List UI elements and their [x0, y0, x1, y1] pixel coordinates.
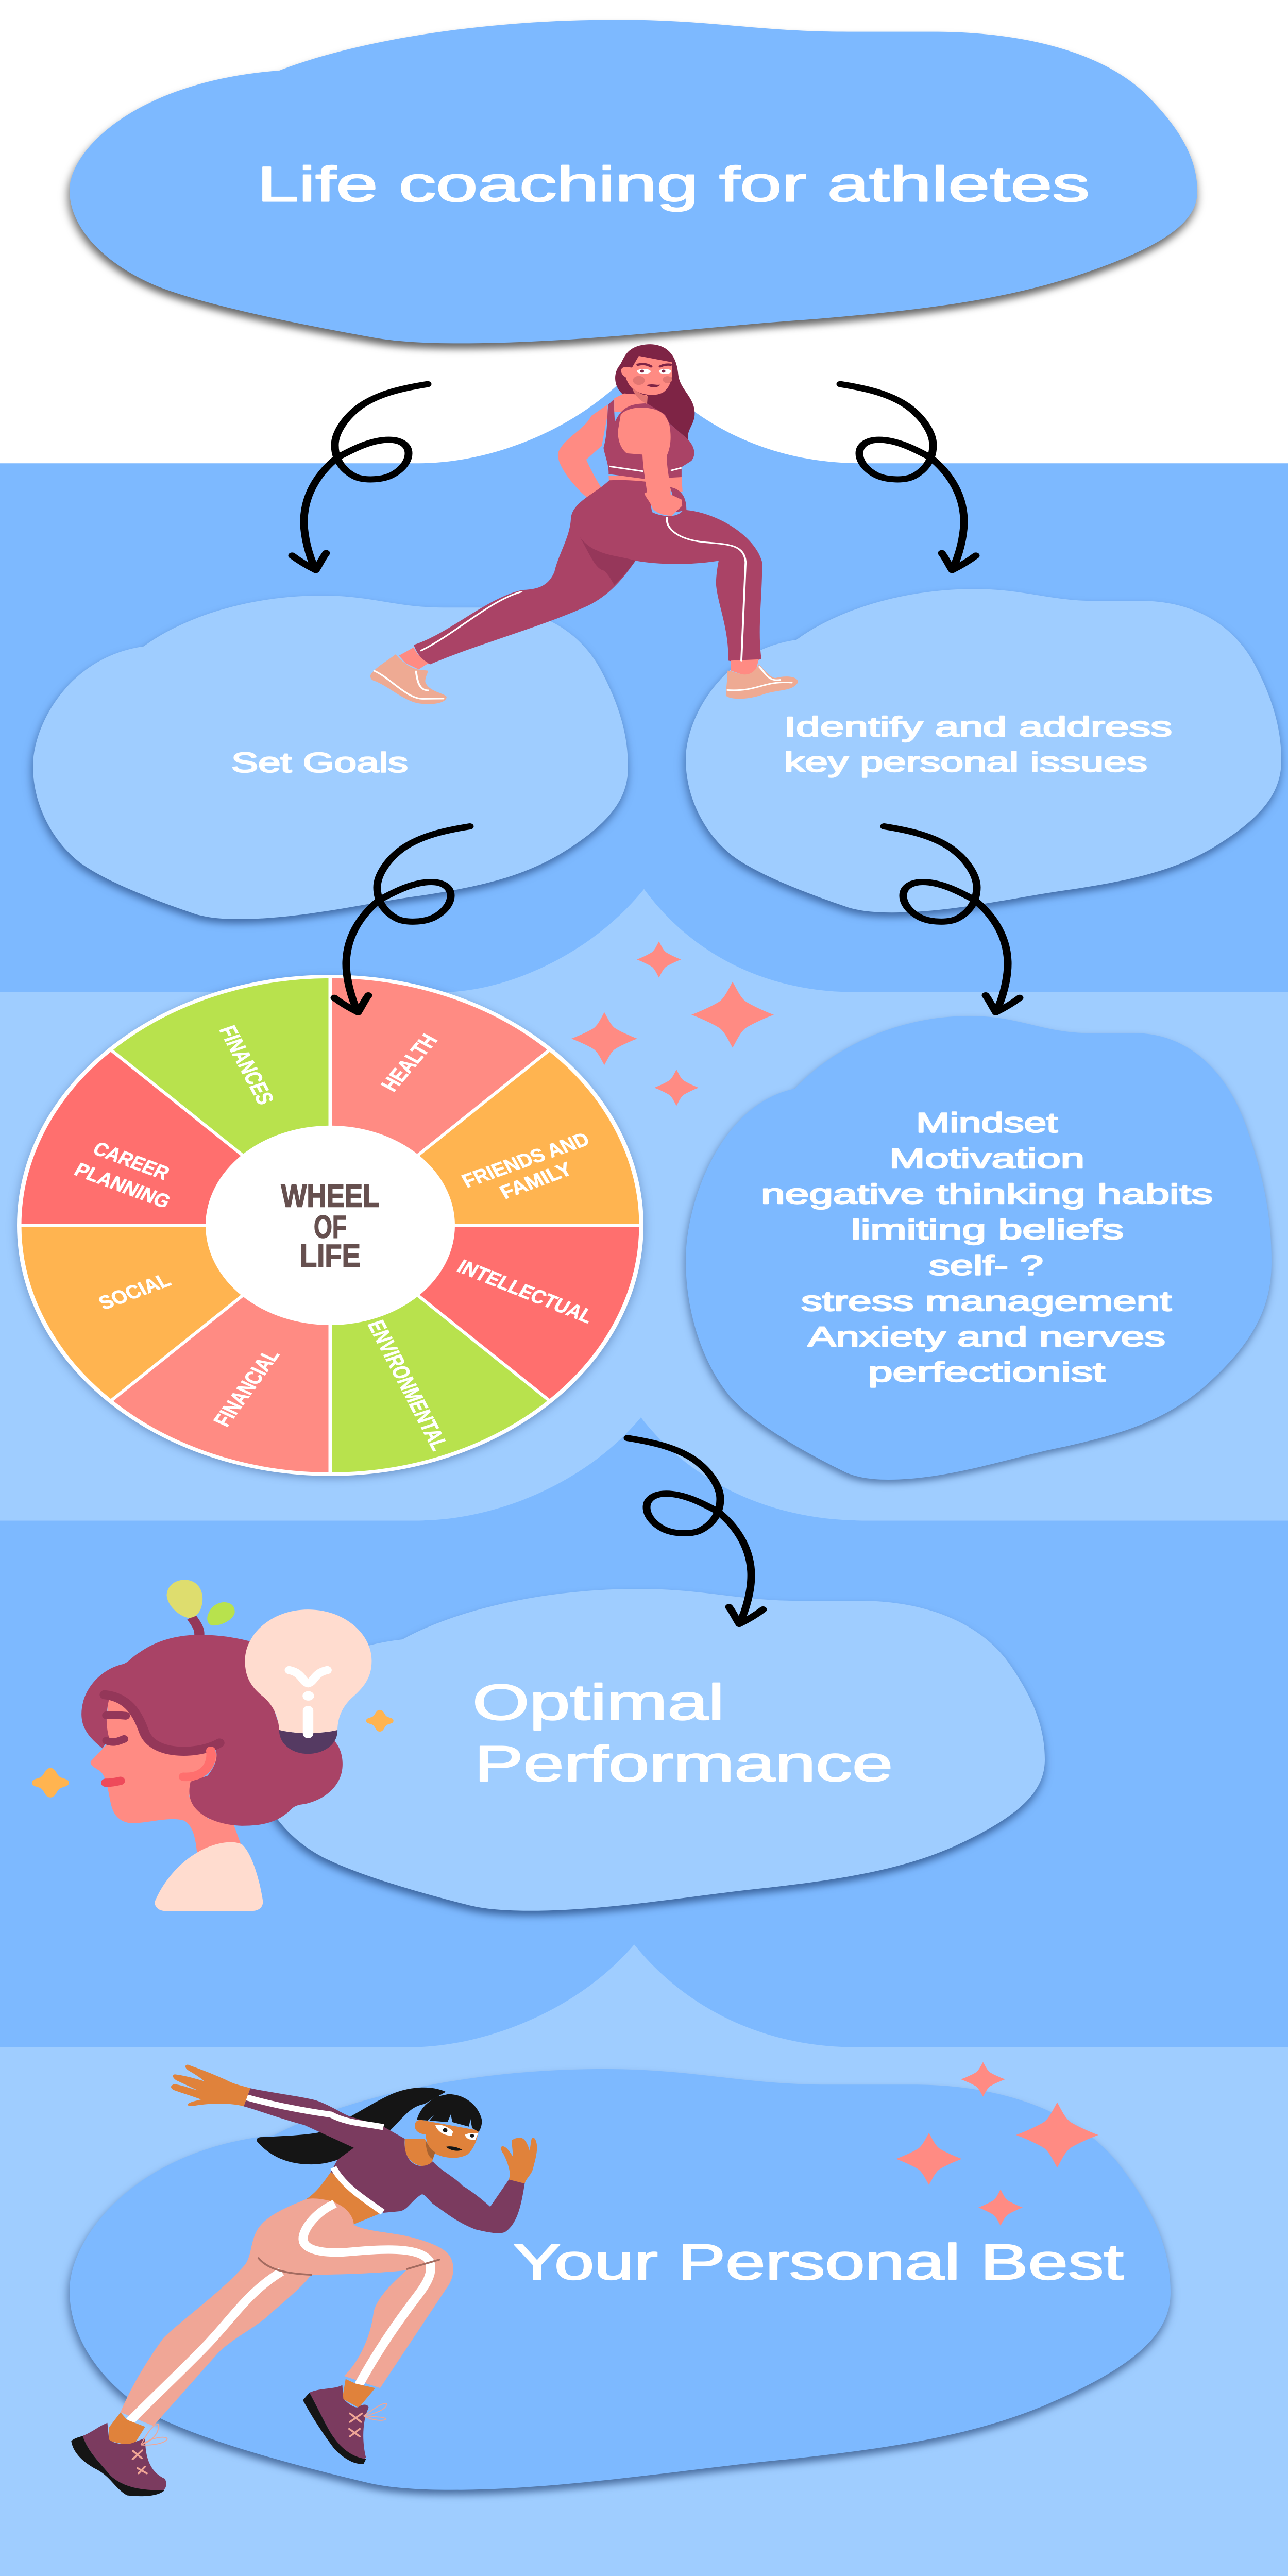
chart: wheel of life: FINANCES: [214, 1023, 279, 1108]
blob: set goals: [33, 596, 628, 919]
chart: wheel of life: CAREER: [89, 1138, 174, 1184]
text: identify and address key personal issues: [784, 711, 1172, 777]
icon: sparkles near wheel: [571, 941, 774, 1106]
arrow: to set goals: [292, 384, 428, 570]
text: issues list: [761, 1107, 1213, 1387]
arrow: to optimal performance: [628, 1438, 763, 1624]
text: identify and address key personal issues: key personal issues: [784, 747, 1147, 777]
text: issues list: Mindset: [916, 1107, 1058, 1138]
chart: wheel of life: HEALTH: [376, 1030, 443, 1095]
text: issues list: stress management: [801, 1285, 1172, 1316]
text: your personal best: Your Personal Best: [513, 2234, 1124, 2290]
illustration: sprinting woman: [71, 2064, 537, 2496]
chart: wheel of life: FAMILY: [496, 1158, 576, 1203]
blob: optimal performance: [256, 1589, 1045, 1911]
text: set goals: Set Goals: [231, 747, 408, 778]
chart: wheel of life: [17, 975, 643, 1476]
text: issues list: Motivation: [889, 1143, 1084, 1174]
chart: wheel of life: OF: [314, 1209, 347, 1245]
chart: wheel of life: WHEEL: [281, 1178, 379, 1214]
band: light section with personal best: [0, 1944, 1288, 2576]
text: issues list: negative thinking habits: [761, 1178, 1213, 1209]
title: Life coaching for athletes: [257, 157, 1090, 212]
text: issues list: self- ?: [929, 1250, 1043, 1281]
chart: wheel of life: FRIENDS AND: [458, 1128, 593, 1192]
chart: wheel of life: LIFE: [300, 1238, 361, 1274]
text: identify and address key personal issues: Identify and address: [784, 711, 1172, 742]
chart: wheel of life: FINANCIAL: [208, 1346, 284, 1430]
illustration: lunging woman: [370, 344, 798, 704]
arrow: to issues list: [884, 826, 1020, 1012]
arrow: to identify issues: [840, 384, 976, 570]
text: optimal performance: Optimal: [472, 1674, 724, 1731]
band: blue section: [0, 360, 1288, 992]
icon: sparkles near personal best: [896, 2062, 1098, 2226]
text: issues list: Anxiety and nerves: [808, 1321, 1165, 1352]
blob: personal best: [70, 2069, 1171, 2490]
text: issues list: perfectionist: [868, 1357, 1105, 1387]
band: blue section with optimal performance: [0, 1417, 1288, 2047]
chart: wheel of life: INTELLECTUAL: [453, 1256, 598, 1327]
blob: issues list: [686, 1016, 1272, 1480]
text: optimal performance: Performance: [474, 1736, 893, 1792]
blob: identify and address: [686, 589, 1281, 912]
title blob: [70, 20, 1197, 343]
chart: wheel of life: ENVIRONMENTAL: [363, 1317, 453, 1453]
chart: wheel of life: SOCIAL: [94, 1269, 175, 1314]
arrow: to wheel of life: [334, 826, 470, 1012]
illustration: head with light bulb: [32, 1580, 394, 1911]
band: light section with wheel: [0, 889, 1288, 1520]
chart: wheel of life: PLANNING: [71, 1159, 175, 1212]
text: issues list: limiting beliefs: [851, 1214, 1124, 1245]
text: optimal performance: [472, 1674, 893, 1792]
